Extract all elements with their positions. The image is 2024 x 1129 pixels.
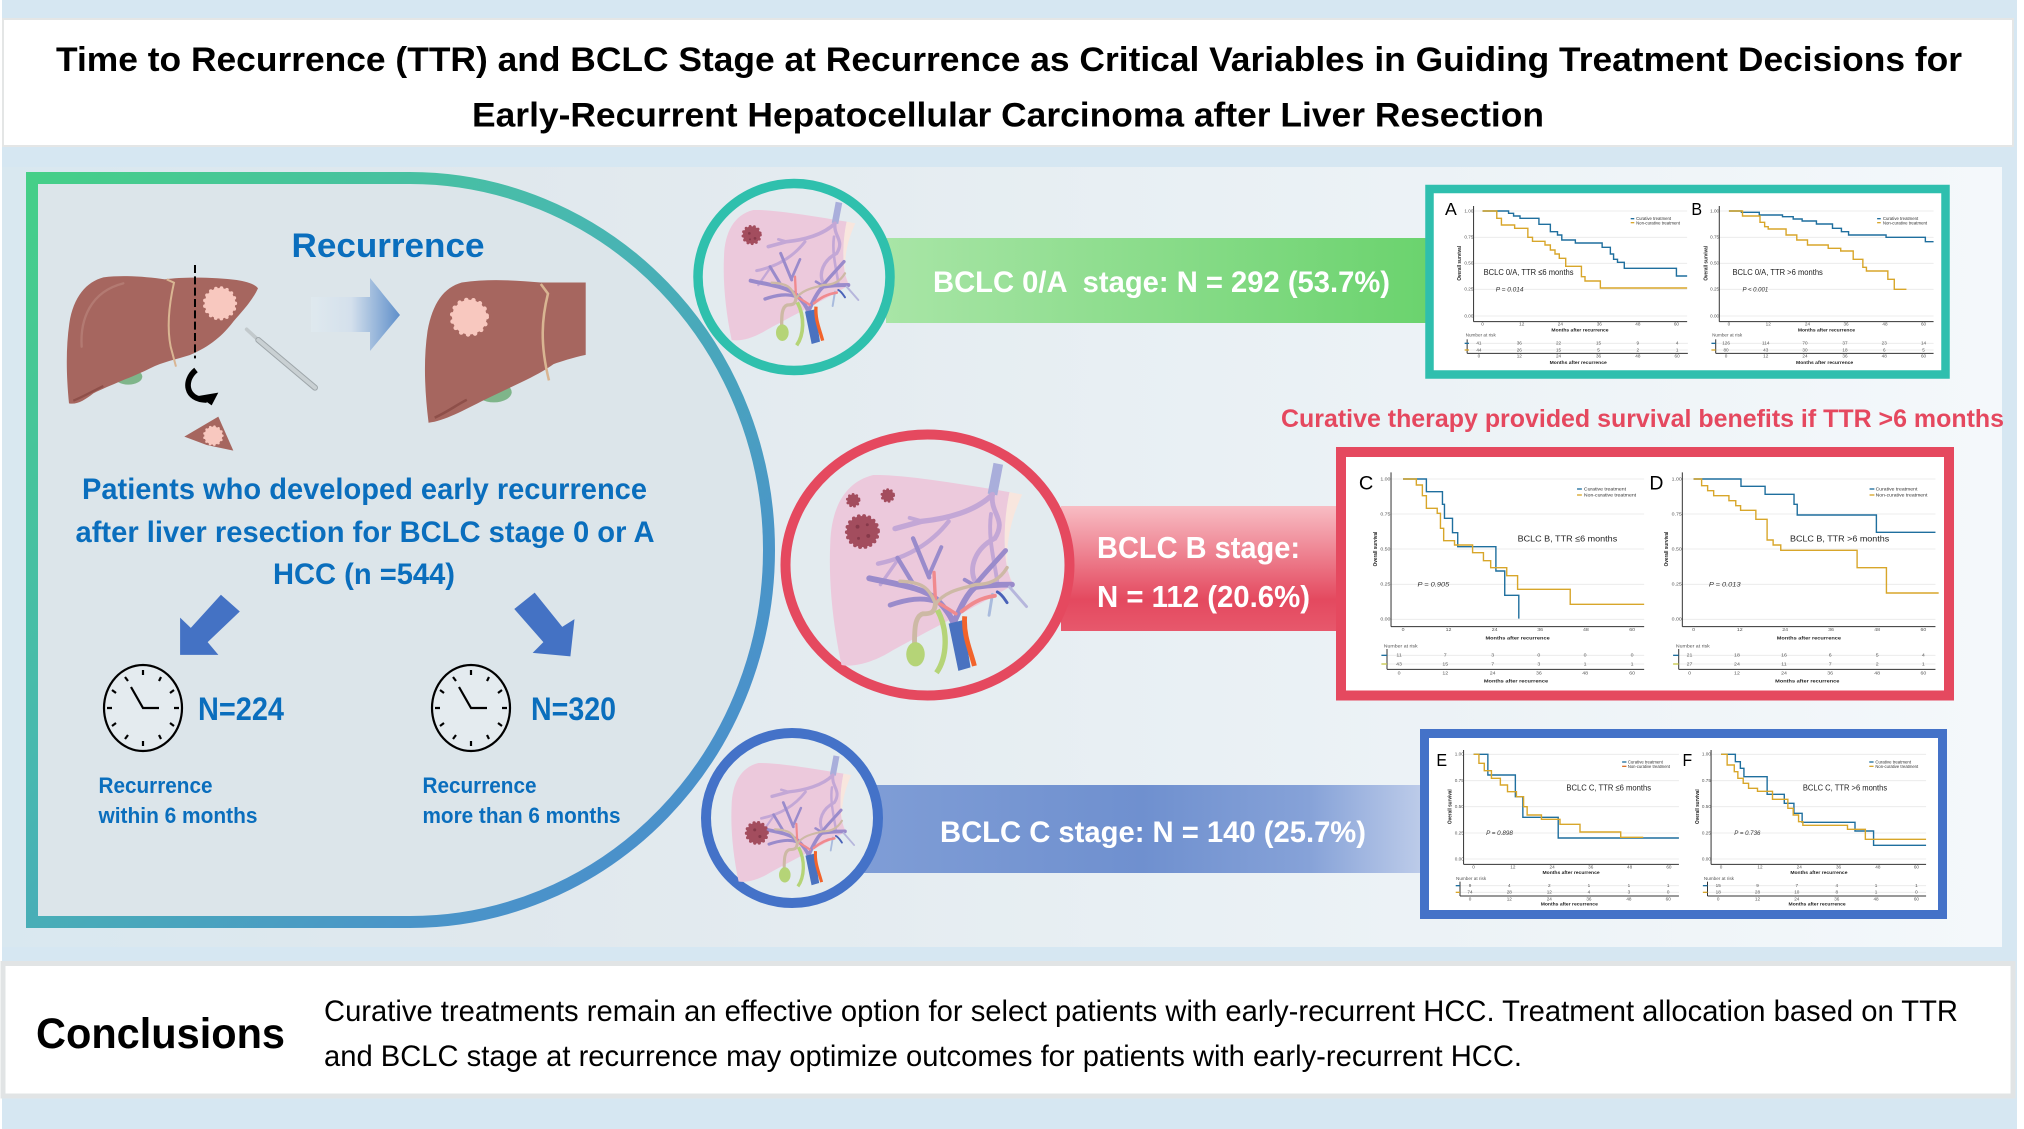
chart: plot E: 3 bbox=[1628, 890, 1631, 895]
panel: KM plots BCLC C bbox=[1424, 734, 1942, 914]
chart: plot F: 0 bbox=[1915, 890, 1918, 895]
heading: conclusions: Conclusions bbox=[36, 1010, 285, 1058]
chart: plot F: 0.75 bbox=[1702, 778, 1711, 783]
chart: plot F: Number at risk bbox=[1704, 876, 1735, 881]
chart: plot D: 1 bbox=[1922, 662, 1925, 667]
chart: plot F: 12 bbox=[1757, 864, 1763, 869]
chart: plot E: 4 bbox=[1508, 883, 1511, 888]
chart: plot C: 15 bbox=[1442, 662, 1449, 667]
chart: plot B: 48 bbox=[1882, 322, 1888, 327]
chart: plot D: 24 bbox=[1734, 662, 1740, 667]
chart: plot E: 12 bbox=[1507, 897, 1512, 902]
chart: plot F: 24 bbox=[1794, 897, 1800, 902]
chart: plot B: 18 bbox=[1842, 347, 1848, 352]
chart: plot A: Months after recurrence bbox=[1550, 360, 1607, 366]
chart: plot A: Overall survival bbox=[1457, 246, 1463, 281]
panel: KM plots BCLC B bbox=[1341, 452, 1949, 696]
chart: plot F: 12 bbox=[1755, 897, 1761, 902]
chart: plot A: 15 bbox=[1596, 341, 1602, 346]
chart: plot C: BCLC B, TTR ≤6 months bbox=[1518, 534, 1617, 544]
chart: plot E: 12 bbox=[1547, 890, 1552, 895]
chart: plot E: 0.00 bbox=[1455, 856, 1464, 861]
chart: plot D: 60 bbox=[1920, 671, 1927, 676]
chart: plot A: 26 bbox=[1517, 347, 1522, 352]
chart: plot A: 12 bbox=[1517, 353, 1522, 358]
chart: plot A: 0 bbox=[1478, 353, 1481, 358]
chart: plot A: 36 bbox=[1596, 353, 1602, 358]
chart: plot D: Curative treatment bbox=[1876, 487, 1918, 492]
title banner: Early-Recurrent Hepatocellular Carcinoma after Liver Resection bbox=[472, 96, 1544, 134]
chart: plot E: 28 bbox=[1507, 890, 1512, 895]
chart: plot B: 37 bbox=[1842, 341, 1848, 346]
chart: plot C: Months after recurrence bbox=[1484, 679, 1548, 684]
label: recurrence more than 6 months: Recurrence bbox=[422, 773, 536, 798]
chart: plot A: 22 bbox=[1556, 341, 1562, 346]
icon: recurrent liver bbox=[425, 280, 586, 423]
label: recurrence more than 6 months: more than 6 months bbox=[422, 803, 620, 828]
chart: plot C: P = 0.905 bbox=[1418, 580, 1450, 588]
chart: plot F: 60 bbox=[1914, 897, 1920, 902]
chart: plot D: 0.50 bbox=[1672, 547, 1682, 552]
banner: BCLC C bbox=[864, 785, 1420, 873]
title banner: Time to Recurrence (TTR) and BCLC Stage at Recurrence as Critical Variables in Guiding Treatment Decisions for bbox=[56, 41, 1962, 79]
chart: plot D: 21 bbox=[1687, 653, 1693, 658]
chart: plot B: 30 bbox=[1802, 347, 1808, 352]
chart: plot E: 1.00 bbox=[1455, 752, 1464, 757]
chart: plot B: P < 0.001 bbox=[1742, 287, 1768, 294]
chart: plot E: E bbox=[1436, 751, 1447, 770]
cohort description bbox=[76, 473, 654, 591]
chart: plot B: 12 bbox=[1766, 322, 1771, 327]
chart: plot B: B bbox=[1691, 200, 1702, 219]
chart: plot B: 0 bbox=[1725, 353, 1728, 358]
chart: plot D: 18 bbox=[1734, 653, 1740, 658]
chart: plot A: 24 bbox=[1558, 322, 1563, 327]
chart: plot E: 74 bbox=[1467, 890, 1473, 895]
chart: plot A: 4 bbox=[1676, 341, 1679, 346]
chart: plot B: 126 bbox=[1722, 341, 1730, 346]
chart: plot E: Months after recurrence bbox=[1542, 870, 1600, 876]
cohort description: HCC (n =544) bbox=[273, 558, 455, 591]
icon: liver circle BCLC B bbox=[786, 434, 1070, 696]
chart: plot A: 2 bbox=[1637, 347, 1640, 352]
chart: plot B: 114 bbox=[1762, 341, 1770, 346]
chart: plot F: BCLC C, TTR >6 months bbox=[1803, 783, 1888, 793]
chart: plot F: 28 bbox=[1755, 890, 1761, 895]
chart: plot E: 0.25 bbox=[1455, 830, 1464, 835]
banner: BCLC 0/A bbox=[886, 238, 1426, 323]
chart: plot B bbox=[1691, 200, 1934, 366]
arrow: down right bbox=[514, 593, 574, 656]
chart: plot B: 14 bbox=[1921, 341, 1927, 346]
icon: scalpel bbox=[247, 329, 315, 388]
chart: plot C bbox=[1359, 472, 1644, 684]
chart: plot B: 24 bbox=[1802, 353, 1808, 358]
label: recurrence within 6 months: Recurrence bbox=[98, 773, 212, 798]
chart: plot A: 0.25 bbox=[1464, 287, 1474, 292]
banner: BCLC B: BCLC B stage: bbox=[1097, 530, 1300, 565]
count: N=224: N=224 bbox=[198, 691, 284, 727]
chart: plot F: 0.50 bbox=[1702, 804, 1711, 809]
chart: plot E: Number at risk bbox=[1456, 876, 1487, 881]
chart: plot D: 12 bbox=[1737, 627, 1743, 633]
chart: plot B: BCLC 0/A, TTR >6 months bbox=[1732, 267, 1823, 277]
chart: plot C: 0.25 bbox=[1380, 582, 1391, 587]
chart: plot E: 0.75 bbox=[1455, 778, 1464, 783]
chart: plot A: 36 bbox=[1597, 322, 1602, 327]
chart: plot A: 60 bbox=[1675, 353, 1680, 358]
callout: curative therapy benefit: Curative therapy provided survival benefits if TTR >6 months bbox=[1281, 405, 2004, 433]
chart: plot D: 0 bbox=[1692, 627, 1695, 633]
arrow: down left bbox=[180, 595, 240, 655]
chart: plot D: 36 bbox=[1828, 627, 1834, 633]
chart: plot C: 24 bbox=[1490, 671, 1496, 676]
chart: plot C: 1 bbox=[1584, 662, 1587, 667]
title banner bbox=[3, 19, 2013, 146]
chart: plot E: 1 bbox=[1588, 883, 1591, 888]
chart: plot B: 36 bbox=[1842, 353, 1848, 358]
chart: plot D: 0 bbox=[1688, 671, 1691, 676]
icon: liver circle BCLC 0/A bbox=[698, 184, 890, 370]
cohort description: after liver resection for BCLC stage 0 or A bbox=[76, 516, 654, 549]
chart: plot C: Months after recurrence bbox=[1485, 636, 1550, 641]
chart: plot B: 0 bbox=[1728, 322, 1731, 327]
conclusions text: Curative treatments remain an effective option for select patients with early-recurrent HCC. Treatment allocation based on TTR bbox=[324, 995, 1958, 1028]
chart: plot C: 12 bbox=[1442, 671, 1449, 676]
chart: plot C: 24 bbox=[1492, 627, 1498, 633]
chart: plot B: Overall survival bbox=[1703, 246, 1710, 281]
chart: plot A: 0 bbox=[1481, 322, 1484, 327]
chart: plot D: Non-curative treatment bbox=[1876, 493, 1928, 498]
chart: plot C: 0 bbox=[1537, 653, 1541, 658]
conclusions text bbox=[324, 995, 1958, 1073]
chart: plot B: 0.00 bbox=[1710, 313, 1720, 318]
chart: plot D: Number at risk bbox=[1676, 644, 1710, 649]
chart: plot E: 9 bbox=[1469, 883, 1472, 888]
chart: plot A: 0.00 bbox=[1464, 313, 1474, 318]
chart: plot E: 60 bbox=[1666, 897, 1671, 902]
panel: conclusions bbox=[3, 964, 2013, 1096]
chart: plot A: 12 bbox=[1519, 322, 1525, 327]
chart: plot E: Non-curative treatment bbox=[1628, 764, 1671, 770]
chart: plot A: 44 bbox=[1476, 347, 1482, 352]
chart: plot A: 15 bbox=[1556, 347, 1562, 352]
chart: plot D: 24 bbox=[1781, 671, 1787, 676]
chart: plot F: 48 bbox=[1875, 864, 1881, 869]
chart: plot D: 7 bbox=[1829, 662, 1832, 667]
chart: plot C: 0 bbox=[1402, 627, 1405, 633]
cohort description: Patients who developed early recurrence bbox=[82, 473, 647, 506]
banner: BCLC B: N = 112 (20.6%) bbox=[1097, 579, 1310, 614]
chart: plot F: 60 bbox=[1914, 864, 1920, 869]
chart: plot B: 70 bbox=[1802, 341, 1808, 346]
chart: plot A: P = 0.014 bbox=[1496, 287, 1524, 294]
chart: plot C: Non-curative treatment bbox=[1584, 493, 1637, 498]
conclusions text: and BCLC stage at recurrence may optimize outcomes for patients with early-recurrent HCC. bbox=[324, 1040, 1522, 1073]
chart: plot B: Months after recurrence bbox=[1796, 360, 1854, 366]
chart: plot D: 0.75 bbox=[1672, 512, 1682, 517]
chart: plot E: 1 bbox=[1667, 883, 1670, 888]
chart: plot A: A bbox=[1445, 200, 1457, 219]
chart: plot E: 0 bbox=[1667, 890, 1670, 895]
chart: plot D: 16 bbox=[1781, 653, 1787, 658]
chart: plot A: 0.50 bbox=[1464, 261, 1474, 266]
chart: plot E bbox=[1436, 750, 1679, 908]
chart: plot E: P = 0.898 bbox=[1486, 830, 1513, 837]
chart: plot E: 60 bbox=[1666, 864, 1672, 869]
chart: plot B: Non-curative treatment bbox=[1883, 220, 1928, 226]
chart: plot F: 15 bbox=[1716, 883, 1721, 888]
chart: plot B: Curative treatment bbox=[1883, 216, 1919, 222]
chart: plot D bbox=[1649, 472, 1939, 684]
chart: plot A: 36 bbox=[1517, 341, 1522, 346]
chart: plot B: 24 bbox=[1805, 322, 1811, 327]
chart: plot B: 0.75 bbox=[1710, 235, 1720, 240]
chart: plot D: 48 bbox=[1874, 671, 1880, 676]
chart: plot C: 48 bbox=[1583, 627, 1589, 633]
chart: plot F: 0.25 bbox=[1702, 830, 1711, 835]
chart: plot C: 7 bbox=[1444, 653, 1447, 658]
chart: plot E: 12 bbox=[1510, 864, 1516, 869]
chart: plot B: 48 bbox=[1882, 353, 1887, 358]
chart: plot E: 0 bbox=[1469, 897, 1472, 902]
chart: plot C: Curative treatment bbox=[1584, 487, 1627, 492]
chart: plot D: 4 bbox=[1922, 653, 1925, 658]
chart: plot B: 5 bbox=[1922, 347, 1925, 352]
chart: plot D: P = 0.013 bbox=[1709, 580, 1741, 588]
chart: plot D: 48 bbox=[1874, 627, 1880, 633]
chart: plot A: BCLC 0/A, TTR ≤6 months bbox=[1484, 267, 1574, 277]
arrow: gradient to recurrence bbox=[311, 278, 400, 351]
chart: plot E: 24 bbox=[1547, 897, 1552, 902]
chart: plot F: 1.00 bbox=[1702, 752, 1711, 757]
label: recurrence more than 6 months bbox=[422, 773, 620, 828]
chart: plot B: 43 bbox=[1763, 347, 1769, 352]
chart: plot F: 0 bbox=[1717, 897, 1720, 902]
chart: plot F bbox=[1682, 750, 1926, 908]
chart: plot E: 2 bbox=[1548, 883, 1551, 888]
chart: plot E: Curative treatment bbox=[1628, 759, 1663, 765]
chart: plot C: 0.75 bbox=[1380, 512, 1391, 517]
chart: plot F: Months after recurrence bbox=[1789, 902, 1846, 908]
chart: plot F: 0 bbox=[1720, 864, 1723, 869]
chart: plot F: F bbox=[1682, 751, 1692, 770]
chart: plot B: Number at risk bbox=[1712, 333, 1743, 338]
chart: plot F: Non-curative treatment bbox=[1875, 764, 1919, 770]
chart: plot B: 60 bbox=[1921, 322, 1927, 327]
chart: plot D: 36 bbox=[1827, 671, 1833, 676]
chart: plot A: Number at risk bbox=[1466, 333, 1497, 338]
chart: plot A: 48 bbox=[1635, 353, 1641, 358]
chart: plot C: Number at risk bbox=[1384, 644, 1418, 649]
chart: plot C: 0 bbox=[1398, 671, 1401, 676]
chart: plot E: 48 bbox=[1627, 864, 1633, 869]
chart: plot B: 1.00 bbox=[1710, 208, 1720, 213]
chart: plot E: 36 bbox=[1588, 864, 1594, 869]
label: recurrence within 6 months: within 6 months bbox=[98, 803, 258, 828]
chart: plot C: 60 bbox=[1629, 671, 1635, 676]
chart: plot C: C bbox=[1359, 472, 1373, 494]
chart: plot E: 1 bbox=[1628, 883, 1631, 888]
chart: plot F: Curative treatment bbox=[1875, 759, 1912, 765]
chart: plot D: 11 bbox=[1781, 662, 1787, 667]
chart: plot C: 11 bbox=[1396, 653, 1402, 658]
chart: plot B: Months after recurrence bbox=[1798, 327, 1855, 333]
chart: plot D: 27 bbox=[1687, 662, 1693, 667]
chart: plot F: 18 bbox=[1716, 890, 1721, 895]
chart: plot D: 12 bbox=[1734, 671, 1740, 676]
banner: BCLC 0/A: BCLC 0/A stage: N = 292 (53.7%) bbox=[933, 266, 1390, 299]
panel: KM plots BCLC 0/A bbox=[1430, 189, 1946, 374]
chart: plot C: 12 bbox=[1446, 627, 1452, 633]
chart: plot A: 1.00 bbox=[1464, 208, 1474, 213]
chart: plot D: 0.00 bbox=[1672, 617, 1682, 622]
chart: plot C: 1 bbox=[1631, 662, 1634, 667]
chart: plot F: Overall survival bbox=[1695, 789, 1701, 824]
chart: plot B: 80 bbox=[1723, 347, 1729, 352]
chart: plot E: 0 bbox=[1472, 864, 1475, 869]
chart: plot B: 0.25 bbox=[1710, 287, 1720, 292]
chart: plot F: 9 bbox=[1756, 883, 1759, 888]
chart: plot C: 1.00 bbox=[1380, 477, 1391, 482]
chart: plot B: 23 bbox=[1882, 341, 1887, 346]
chart: plot C: 48 bbox=[1582, 671, 1588, 676]
chart: plot A: Months after recurrence bbox=[1551, 327, 1609, 333]
chart: plot E: Months after recurrence bbox=[1541, 902, 1598, 908]
main panel background bbox=[2, 167, 2002, 947]
chart: plot A: Curative treatment bbox=[1636, 216, 1672, 222]
chart: plot A: 60 bbox=[1674, 322, 1680, 327]
chart: plot E: 36 bbox=[1586, 897, 1592, 902]
chart: plot D: D bbox=[1649, 472, 1663, 494]
chart: plot A: 9 bbox=[1637, 341, 1640, 346]
chart: plot A: Non-curative treatment bbox=[1636, 220, 1681, 226]
chart: plot E: 48 bbox=[1626, 897, 1632, 902]
chart: plot F: 1 bbox=[1875, 883, 1878, 888]
chart: plot A bbox=[1445, 200, 1688, 366]
chart: plot A: 0.75 bbox=[1464, 235, 1474, 240]
chart: plot E: BCLC C, TTR ≤6 months bbox=[1566, 783, 1652, 793]
chart: plot D: 6 bbox=[1829, 653, 1832, 658]
chart: plot F: 8 bbox=[1835, 890, 1839, 895]
chart: plot D: 0.25 bbox=[1672, 582, 1682, 587]
chart: plot C: 36 bbox=[1537, 627, 1543, 633]
chart: plot F: P = 0.736 bbox=[1734, 830, 1761, 837]
chart: plot C: 0 bbox=[1584, 653, 1587, 658]
chart: plot C: 3 bbox=[1491, 653, 1494, 658]
chart: plot E: 4 bbox=[1588, 890, 1591, 895]
icon: clock left bbox=[104, 665, 182, 751]
chart: plot D: 5 bbox=[1876, 653, 1879, 658]
chart: plot D: 1.00 bbox=[1672, 477, 1682, 482]
chart: plot C: 36 bbox=[1536, 671, 1542, 676]
chart: plot D: Months after recurrence bbox=[1777, 636, 1841, 641]
chart: plot D: 60 bbox=[1920, 627, 1927, 633]
count: N=320: N=320 bbox=[531, 691, 616, 727]
chart: plot D: BCLC B, TTR >6 months bbox=[1790, 534, 1889, 544]
icon: liver before resection bbox=[67, 265, 258, 405]
chart: plot C: Overall survival bbox=[1373, 531, 1379, 566]
chart: plot C: 0.50 bbox=[1380, 547, 1391, 552]
icon: clock right bbox=[432, 665, 510, 751]
chart: plot A: 24 bbox=[1556, 353, 1562, 358]
chart: plot C: 0.00 bbox=[1380, 617, 1391, 622]
chart: plot D: Overall survival bbox=[1664, 531, 1670, 566]
chart: plot B: 12 bbox=[1763, 353, 1769, 358]
chart: plot C: 7 bbox=[1491, 662, 1494, 667]
chart: plot D: 2 bbox=[1876, 662, 1879, 667]
banner: BCLC C: BCLC C stage: N = 140 (25.7%) bbox=[940, 816, 1366, 849]
chart: plot B: 60 bbox=[1921, 353, 1927, 358]
chart: plot A: 41 bbox=[1476, 341, 1482, 346]
chart: plot F: 36 bbox=[1834, 897, 1840, 902]
chart: plot F: 1 bbox=[1915, 883, 1918, 888]
chart: plot D: Months after recurrence bbox=[1775, 679, 1840, 684]
chart: plot F: 4 bbox=[1835, 883, 1839, 888]
chart: plot F: 48 bbox=[1873, 897, 1879, 902]
chart: plot E: Overall survival bbox=[1447, 789, 1453, 824]
chart: plot A: 5 bbox=[1597, 347, 1600, 352]
banner: BCLC B bbox=[1061, 506, 1336, 631]
chart: plot E: 24 bbox=[1550, 864, 1555, 869]
chart: plot F: 7 bbox=[1795, 883, 1799, 888]
chart: plot A: 48 bbox=[1635, 322, 1641, 327]
chart: plot C: 0 bbox=[1631, 653, 1634, 658]
chart: plot F: Months after recurrence bbox=[1790, 870, 1848, 876]
icon: liver circle BCLC C bbox=[706, 733, 878, 903]
chart: plot B: 6 bbox=[1883, 347, 1886, 352]
heading: recurrence: Recurrence bbox=[292, 227, 484, 265]
chart: plot F: 0.00 bbox=[1702, 856, 1711, 861]
chart: plot D: 24 bbox=[1782, 627, 1788, 633]
chart: plot C: 60 bbox=[1629, 627, 1635, 633]
chart: plot A: 1 bbox=[1676, 347, 1679, 352]
icon: resected liver piece bbox=[184, 417, 233, 451]
label: recurrence within 6 months bbox=[98, 773, 258, 828]
chart: plot E: 0.50 bbox=[1455, 804, 1464, 809]
panel: patient cohort bbox=[32, 178, 769, 922]
chart: plot B: 36 bbox=[1843, 322, 1849, 327]
chart: plot F: 10 bbox=[1794, 890, 1800, 895]
chart: plot F: 1 bbox=[1875, 890, 1878, 895]
chart: plot C: 43 bbox=[1396, 662, 1402, 667]
chart: plot F: 24 bbox=[1797, 864, 1802, 869]
chart: plot F: 36 bbox=[1836, 864, 1842, 869]
chart: plot B: 0.50 bbox=[1710, 261, 1720, 266]
chart: plot C: 3 bbox=[1537, 662, 1541, 667]
